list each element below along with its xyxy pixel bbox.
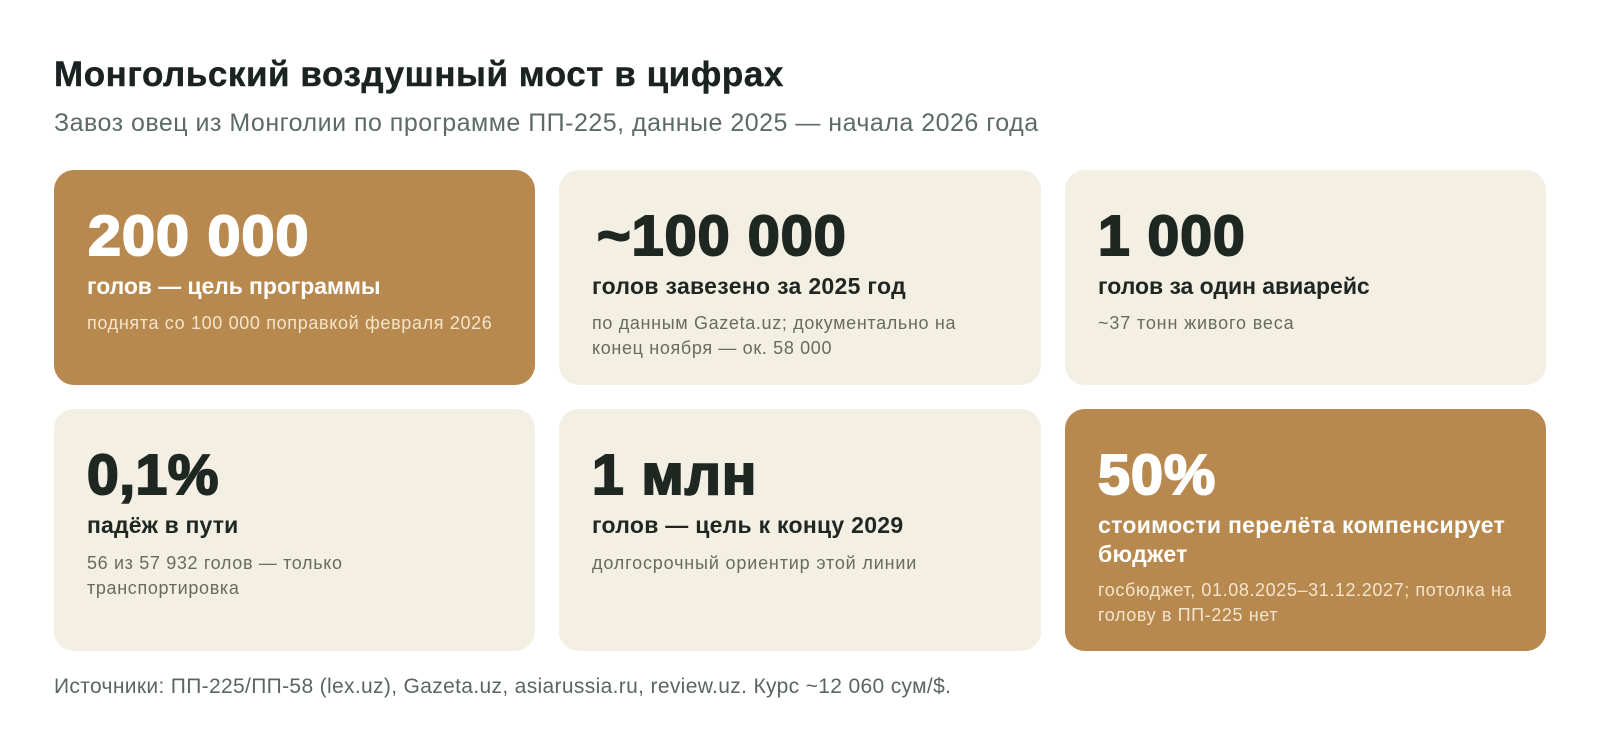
- stat label: голов — цель программы: [87, 273, 380, 299]
- stat note: голову в ПП-225 нет: [1098, 605, 1278, 625]
- stat note: 56 из 57 932 голов — только: [87, 553, 343, 573]
- stat number: 1 000: [1098, 204, 1246, 268]
- sources footnote: Источники: ПП-225/ПП-58 (lex.uz), Gazeta.uz, asiarussia.ru, review.uz. Курс ~12 060 сум/$.: [54, 675, 951, 698]
- subtitle: Завоз овец из Монголии по программе ПП-225, данные 2025 — начала 2026 года: [54, 109, 1039, 137]
- title: Монгольский воздушный мост в цифрах: [54, 55, 784, 94]
- stat number: 0,1%: [87, 443, 219, 507]
- panel: 200 000 goal: [54, 170, 535, 385]
- stat note: [1098, 580, 1512, 625]
- panel: 1 million target: [559, 409, 1041, 651]
- stat note: по данным Gazeta.uz; документально на: [592, 313, 956, 333]
- stat label: [1098, 512, 1505, 567]
- stat label: голов за один авиарейс: [1098, 273, 1370, 299]
- stat number: 1 млн: [592, 443, 757, 507]
- stat note: транспортировка: [87, 578, 240, 598]
- stat label: бюджет: [1098, 541, 1188, 567]
- stat note: долгосрочный ориентир этой линии: [592, 553, 917, 573]
- stat number: 200 000: [88, 204, 310, 268]
- panel: 1 000 per flight: [1065, 170, 1546, 385]
- stat label: голов завезено за 2025 год: [592, 273, 906, 299]
- stat note: ~37 тонн живого веса: [1098, 313, 1294, 333]
- stat note: госбюджет, 01.08.2025–31.12.2027; потолка на: [1098, 580, 1512, 600]
- panel: 100 000 imported: [559, 170, 1041, 385]
- stat number: ~100 000: [597, 204, 847, 268]
- stat number: 50%: [1098, 443, 1216, 507]
- stat note: [87, 553, 343, 598]
- stat note: конец ноября — ок. 58 000: [592, 338, 832, 358]
- panel: 50% subsidy: [1065, 409, 1546, 651]
- panel: 0,1% mortality: [54, 409, 535, 651]
- stat label: голов — цель к концу 2029: [592, 512, 903, 538]
- stat label: стоимости перелёта компенсирует: [1098, 512, 1505, 538]
- stat note: поднята со 100 000 поправкой февраля 2026: [87, 313, 492, 333]
- stat label: падёж в пути: [87, 512, 238, 538]
- stat note: [592, 313, 956, 358]
